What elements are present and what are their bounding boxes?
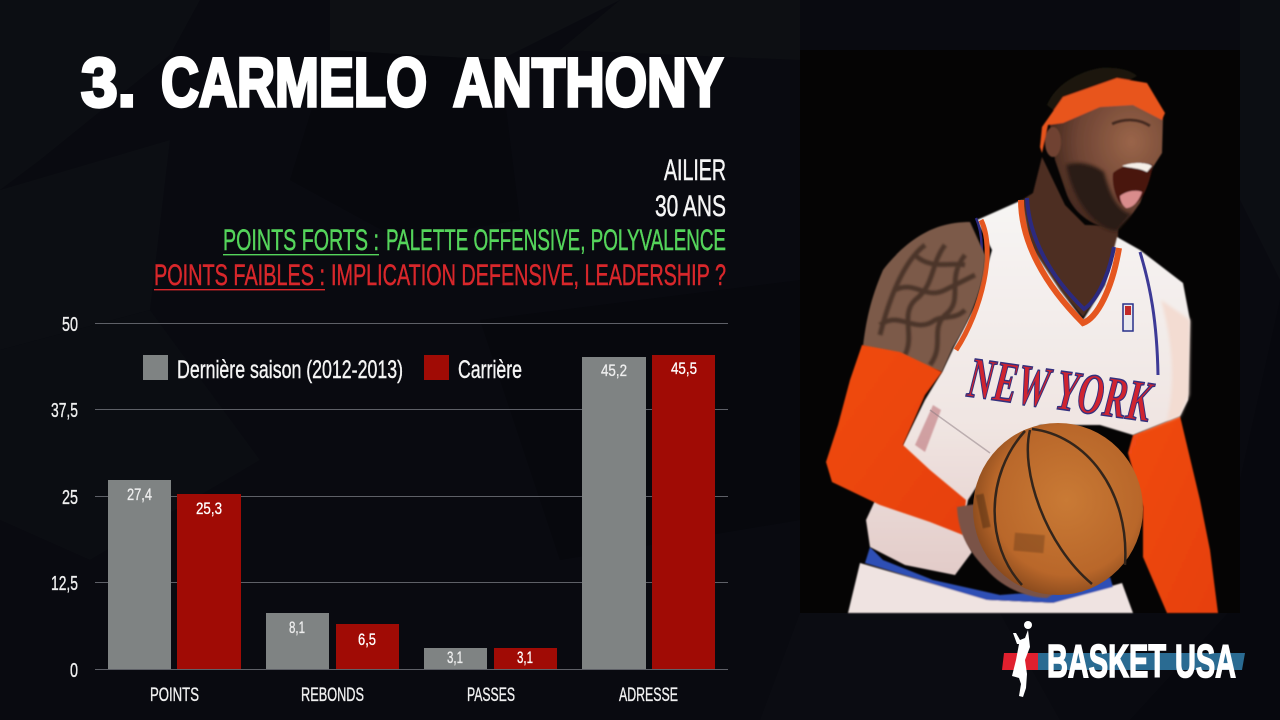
hand and basketball [957,423,1143,598]
y axis labels: 25 [62,487,78,509]
bars: rebonds: REBONDS [301,685,364,706]
eye and brow shading [1112,120,1150,126]
bars: passes: PASSES [467,685,515,706]
title: 3. [81,44,136,121]
legend: Dernière saison (2012-2013) [177,356,403,384]
bars: points [108,480,241,706]
logo wordmark: BASKET [1047,635,1166,687]
strengths: POINTS FORTS : [223,224,379,257]
bars: points: 27,4 [127,485,152,504]
bars: passes: 3,1 [447,648,463,667]
bars: adresse: ADRESSE [619,685,678,706]
mouth [1113,163,1153,206]
headband [1040,78,1165,153]
jersey [866,198,1190,575]
logo: Basket USA [1002,621,1245,697]
y axis labels: 50 [62,314,78,336]
bars: rebonds: 6,5 [358,630,376,649]
logo player silhouette [1012,621,1032,697]
strengths: PALETTE OFFENSIVE, POLYVALENCE [386,224,726,257]
bars: passes [424,648,557,706]
legend: Carrière [458,356,522,384]
bars: rebonds [266,613,399,706]
strengths [223,224,726,257]
player photo illustration [800,50,1240,613]
age: 30 ANS [655,190,726,223]
logo wordmark: USA [1175,635,1236,687]
y axis labels: 0 [70,660,78,682]
weaknesses: IMPLICATION DEFENSIVE, LEADERSHIP ? [331,259,726,292]
bars: rebonds: 8,1 [289,618,305,637]
y axis labels: 37,5 [51,400,78,422]
jersey lettering: NEW YORK [964,344,1157,435]
logo stripes [1002,653,1038,670]
bars: points: 25,3 [196,499,222,518]
position: AILIER [664,154,726,187]
right arm sleeve [1128,416,1218,613]
title: ANTHONY [453,44,723,121]
y axis labels [51,314,78,682]
tattooed arm [863,222,985,372]
bars: passes: 3,1 [517,648,533,667]
shorts and waistband [848,547,1133,613]
title: CARMELO [161,44,427,121]
player info text block [154,154,726,292]
bars: adresse [582,355,715,706]
bar chart [51,314,728,706]
title [81,44,723,121]
neck and chest [1022,157,1118,317]
left arm sleeve [826,345,966,535]
y axis labels: 12,5 [51,573,78,595]
bars: points: POINTS [150,685,199,706]
weaknesses [154,259,726,292]
bars: adresse: 45,5 [671,359,697,378]
weaknesses: POINTS FAIBLES : [154,259,325,292]
head [1040,68,1165,231]
bars: adresse: 45,2 [601,361,627,380]
